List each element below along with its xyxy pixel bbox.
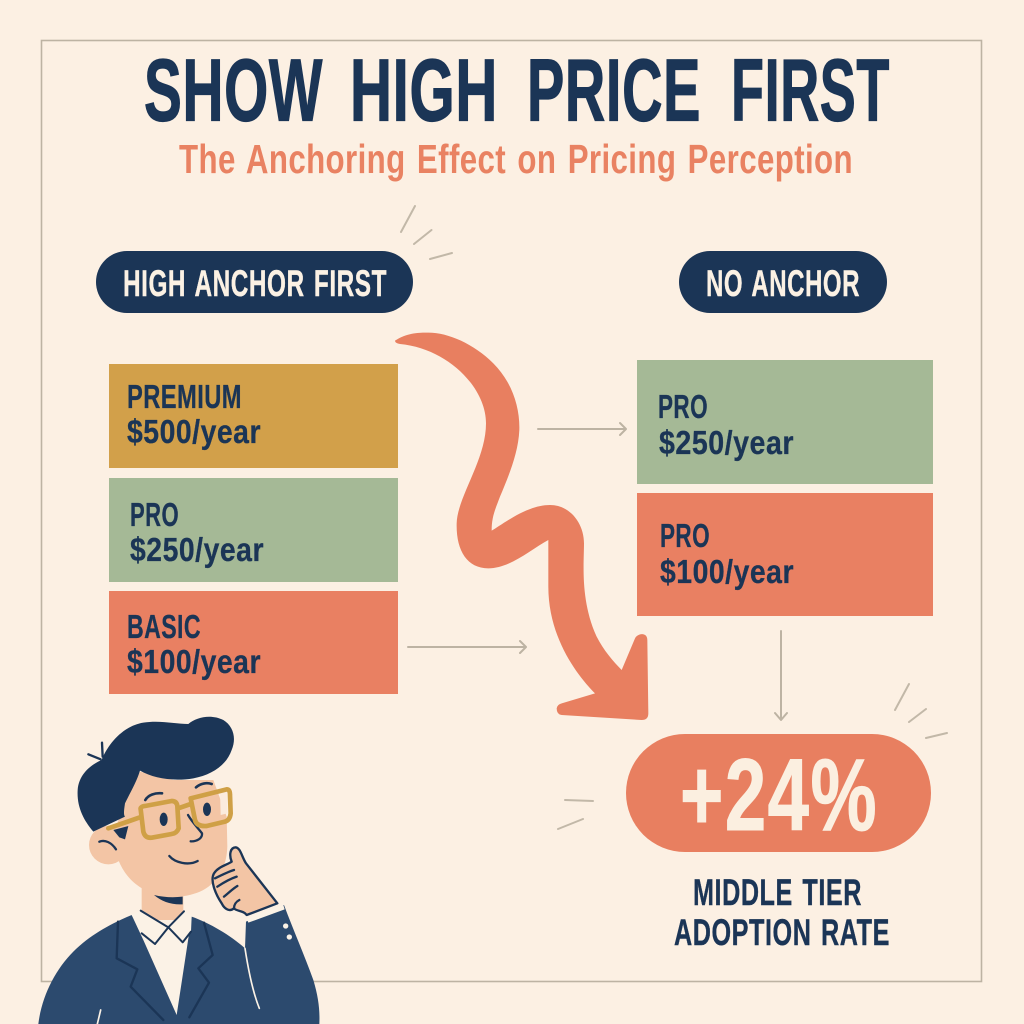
panel: premium tier: $500/year <box>127 413 261 450</box>
icon: emphasis rays by result pill <box>558 684 947 829</box>
panel: pro tier <box>109 478 398 582</box>
arrow: curved coral arrow <box>395 333 648 720</box>
pill: high anchor first: HIGH ANCHOR FIRST <box>123 263 387 304</box>
title: SHOW <box>144 40 323 140</box>
title <box>144 40 890 140</box>
panel: premium tier <box>109 364 398 468</box>
panel: pro tier: $250/year <box>130 531 264 568</box>
panel: premium tier: PREMIUM <box>127 378 242 415</box>
panel: no anchor pro 100: PRO <box>660 517 710 554</box>
icon: emphasis rays by left pill <box>401 206 452 259</box>
panel: basic tier <box>109 591 398 694</box>
arrow: thin right arrow top <box>538 423 626 435</box>
panel: pro tier: PRO <box>130 496 179 533</box>
callout: plus 24 percent: +24% <box>680 738 878 852</box>
pill: high anchor first <box>96 251 413 313</box>
panel: basic tier: BASIC <box>127 608 201 645</box>
title: PRICE <box>527 40 701 140</box>
pill: no anchor: NO ANCHOR <box>706 263 860 304</box>
icon: thinking man with glasses <box>38 717 319 1024</box>
pill: no anchor <box>679 251 887 313</box>
panel: no anchor pro 100: $100/year <box>660 553 794 590</box>
title: HIGH <box>350 40 498 140</box>
panel: no anchor pro 250 <box>637 360 933 484</box>
text: middle tier adoption rate: MIDDLE TIER <box>693 872 862 913</box>
text: middle tier adoption rate: ADOPTION RATE <box>674 912 890 953</box>
panel: basic tier: $100/year <box>127 643 261 680</box>
arrow: thin down arrow <box>775 631 787 720</box>
panel: no anchor pro 100 <box>637 493 933 616</box>
panel: no anchor pro 250: PRO <box>658 388 708 425</box>
text: middle tier adoption rate <box>674 872 890 953</box>
arrow: thin right arrow bottom <box>408 641 526 653</box>
panel: no anchor pro 250: $250/year <box>659 424 794 461</box>
title: FIRST <box>731 40 890 140</box>
